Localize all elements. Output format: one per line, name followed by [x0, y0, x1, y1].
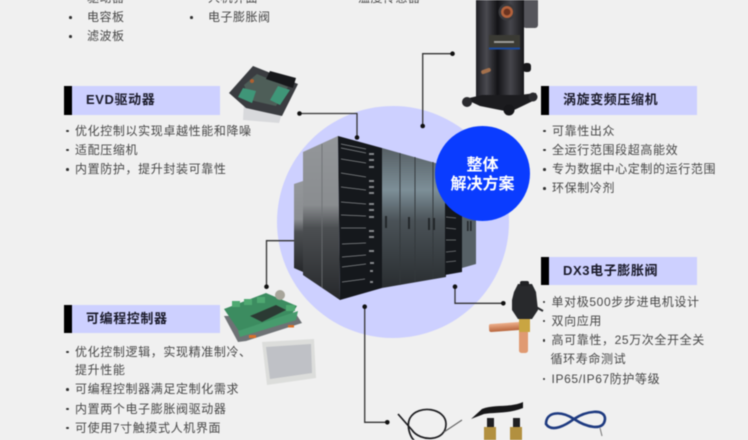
heading: EVD driver: EVD驱动器	[86, 92, 155, 107]
icon: EVD driver module	[229, 66, 298, 123]
text block: EVD driver features	[65, 124, 252, 176]
text block: compressor features: 环保制冷剂	[552, 181, 615, 195]
solution badge circle	[435, 126, 530, 221]
badge text: 整体	[466, 157, 498, 174]
badge text: 解决方案	[450, 176, 514, 193]
icon: DX3 electronic expansion valve	[489, 281, 543, 353]
text block: compressor features: 专为数据中心定制的运行范围	[552, 162, 716, 176]
top middle list: control components: 电子膨胀阀	[208, 10, 271, 24]
text block: controller features: 优化控制逻辑，实现精准制冷、	[75, 344, 252, 358]
connector: EVD driver	[297, 111, 359, 140]
icon: scroll inverter compressor	[462, 0, 538, 116]
text block: controller features: 可使用7寸触摸式人机界面	[75, 421, 221, 435]
text block: compressor features	[542, 124, 716, 195]
text block: controller features: 可编程控制器满足定制化需求	[75, 382, 239, 396]
text block: valve features: 高可靠性，25万次全开全关	[552, 333, 705, 347]
text block: valve features: IP65/IP67防护等级	[552, 372, 660, 386]
text block: EVD driver features: 优化控制以实现卓越性能和降噪	[75, 124, 252, 138]
heading: scroll inverter compressor: 涡旋变频压缩机	[563, 92, 658, 107]
background circle	[277, 106, 509, 338]
text block: compressor features: 可靠性出众	[552, 124, 615, 138]
text block: valve features	[542, 294, 705, 386]
text block: valve features: 单对极500步步进电机设计	[552, 294, 700, 308]
connector: compressor	[420, 51, 455, 128]
icon: blue sensor cable	[546, 412, 605, 436]
text block: compressor features: 全运行范围段超高能效	[552, 143, 678, 157]
heading: programmable controller: 可编程控制器	[86, 310, 168, 326]
connector: expansion valve	[453, 284, 506, 306]
server racks	[294, 136, 476, 300]
badge text	[450, 155, 515, 193]
top left list: power components	[68, 0, 125, 43]
text block: valve features: 循环寿命测试	[550, 352, 626, 366]
text block: EVD driver features: 适配压缩机	[75, 143, 138, 157]
heading: programmable controller	[64, 304, 220, 333]
top left list: power components: 滤波板	[87, 29, 125, 43]
connector: sensors	[362, 304, 390, 425]
connector: controller	[264, 241, 294, 289]
icon: temperature sensor cable	[398, 409, 462, 440]
top left list: power components: 电容板	[87, 10, 125, 24]
text block: controller features	[65, 344, 252, 435]
heading: scroll inverter compressor	[541, 86, 697, 114]
text block: controller features: 提升性能	[75, 363, 125, 377]
icon: programmable controller board	[224, 290, 302, 342]
heading: EVD driver	[64, 86, 220, 114]
text block: EVD driver features: 内置防护，提升封装可靠性	[75, 162, 226, 176]
text block: controller features: 内置两个电子膨胀阀驱动器	[75, 402, 226, 416]
icon: touch screen panel	[262, 339, 316, 385]
text block: valve features: 双向应用	[552, 314, 602, 328]
heading: DX3 electronic expansion valve	[541, 256, 697, 285]
heading: DX3 electronic expansion valve: DX3电子膨胀阀	[563, 262, 658, 278]
top middle list: control components	[189, 0, 271, 24]
icon: pressure sensors	[471, 402, 523, 440]
